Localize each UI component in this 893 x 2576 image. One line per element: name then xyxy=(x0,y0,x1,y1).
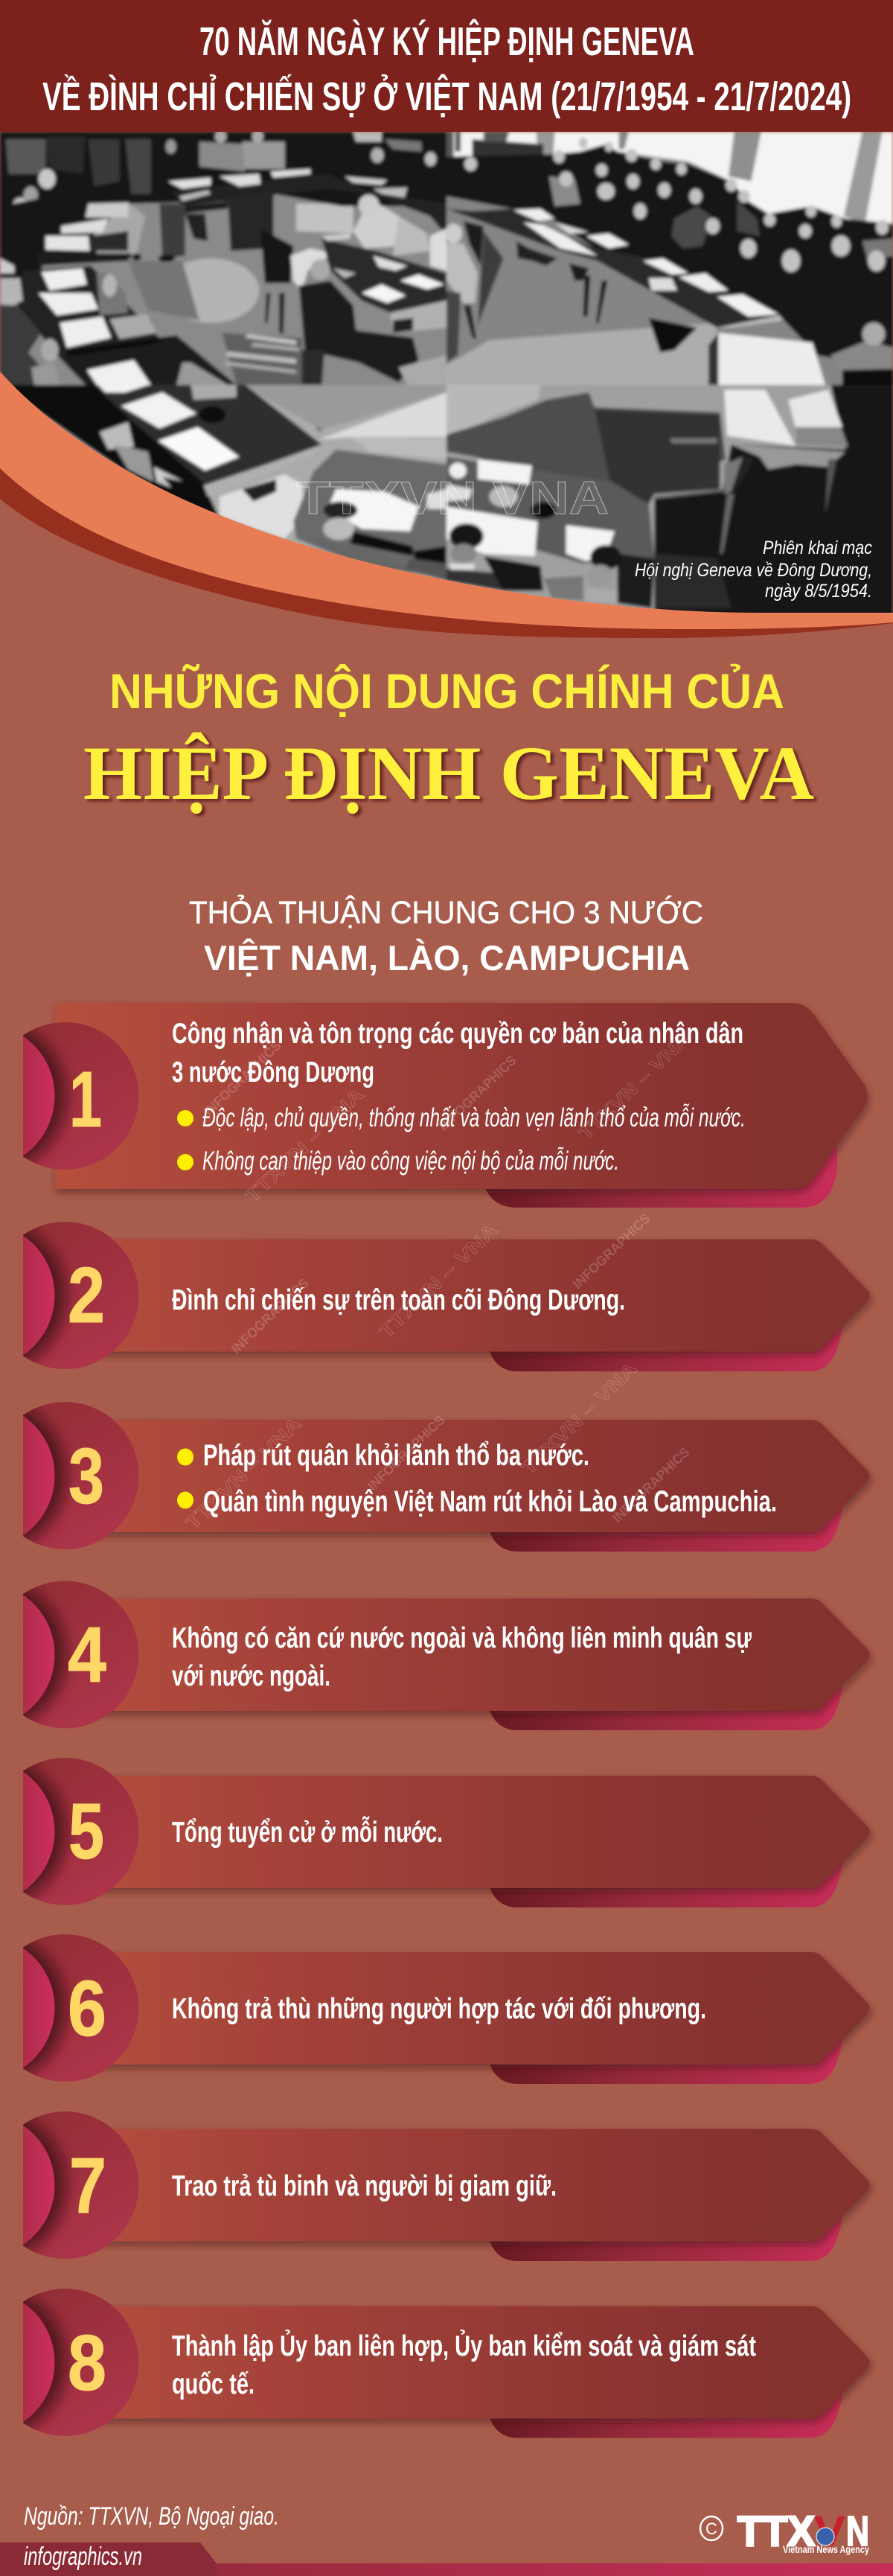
watermarks: INFOGRAPHICS xyxy=(365,1412,448,1493)
item 8 xyxy=(0,2286,869,2439)
item 7 xyxy=(0,2108,869,2262)
item 7: 7 xyxy=(69,2142,106,2230)
watermarks: INFOGRAPHICS xyxy=(570,1211,653,1292)
subheading: agreement for 3 countries xyxy=(189,894,703,978)
photo: opening session of the Geneva conference xyxy=(0,131,893,638)
subheading: agreement for 3 countries: VIỆT NAM, LÀO, CAMPUCHIA xyxy=(204,938,690,978)
TTXVN logo: C xyxy=(705,2519,717,2538)
item 4: 4 xyxy=(68,1611,106,1699)
item 5: Tổng tuyển cử ở mỗi nước. xyxy=(172,1816,443,1849)
item 2: 2 xyxy=(68,1252,105,1339)
item 2 xyxy=(0,1219,869,1372)
watermarks: INFOGRAPHICS xyxy=(228,1275,312,1356)
heading: main content: NHỮNG NỘI DUNG CHÍNH CỦA xyxy=(109,663,784,718)
source note: Nguồn: TTXVN, Bộ Ngoại giao. xyxy=(24,2502,279,2531)
photo top-right quadrant xyxy=(445,132,893,385)
item 6 xyxy=(0,1931,869,2085)
item 3: Pháp rút quân khỏi lãnh thổ ba nước. xyxy=(203,1439,589,1472)
watermarks: TTXVN – VNA xyxy=(518,1358,641,1479)
item 8: quốc tế. xyxy=(172,2368,255,2400)
lower background under swoosh xyxy=(0,499,893,655)
orange swoosh xyxy=(0,372,893,648)
watermarks: TTXVN – VNA xyxy=(182,1413,306,1534)
photo caption: Phiên khai mạc xyxy=(763,538,872,558)
heading: Hiệp định Geneva: HIỆP ĐỊNH GENEVA xyxy=(83,731,814,816)
item 3: 3 xyxy=(68,1432,104,1520)
item 6: Không trả thù những người hợp tác với đối phương. xyxy=(172,1993,706,2025)
item 5: 5 xyxy=(68,1788,104,1875)
TTXVN logo: Vietnam News Agency xyxy=(783,2543,869,2555)
item 1: Không can thiệp vào công việc nội bộ của mỗi nước. xyxy=(202,1147,619,1176)
watermarks: TTXVN – VNA xyxy=(242,1084,368,1207)
watermarks xyxy=(182,1028,694,1534)
watermarks: INFOGRAPHICS xyxy=(201,1038,284,1119)
item 4: với nước ngoài. xyxy=(172,1660,330,1692)
photo bottom-right quadrant xyxy=(446,385,893,638)
footer strip xyxy=(0,2542,893,2576)
item 8: 8 xyxy=(68,2319,106,2407)
item 5 xyxy=(0,1755,869,1908)
item 1: 3 nước Đông Dương xyxy=(172,1056,374,1088)
subheading: agreement for 3 countries: THỎA THUẬN CHUNG CHO 3 NƯỚC xyxy=(189,894,703,931)
item 1 xyxy=(0,1003,868,1208)
TTXVN logo: V xyxy=(814,2508,845,2555)
watermarks: INFOGRAPHICS xyxy=(609,1444,693,1525)
TTXVN logo: TTX xyxy=(737,2508,815,2555)
dark red swoosh xyxy=(0,468,893,648)
header band xyxy=(0,0,893,132)
item 6: 6 xyxy=(68,1965,106,2053)
watermarks: TTXVN – VNA xyxy=(575,1028,694,1144)
website: infographics.vn xyxy=(24,2542,142,2571)
watermarks: INFOGRAPHICS xyxy=(436,1053,519,1134)
title xyxy=(42,19,851,119)
photo bottom-left quadrant xyxy=(11,382,449,580)
item 7: Trao trả tù binh và người bị giam giữ. xyxy=(172,2170,557,2202)
photo watermark: TTXVN VNA xyxy=(296,473,609,524)
photo caption: ngày 8/5/1954. xyxy=(765,581,872,602)
item 3 xyxy=(0,1399,869,1552)
item 1: 1 xyxy=(69,1056,102,1144)
item 2: Đình chỉ chiến sự trên toàn cõi Đông Dương. xyxy=(172,1284,625,1316)
TTXVN logo: N xyxy=(846,2508,869,2555)
photo caption xyxy=(635,538,872,602)
item 4 xyxy=(0,1578,869,1732)
TTXVN logo xyxy=(700,2508,869,2555)
photo top-left quadrant xyxy=(0,131,446,385)
watermarks: TTXVN – VNA xyxy=(376,1220,502,1342)
